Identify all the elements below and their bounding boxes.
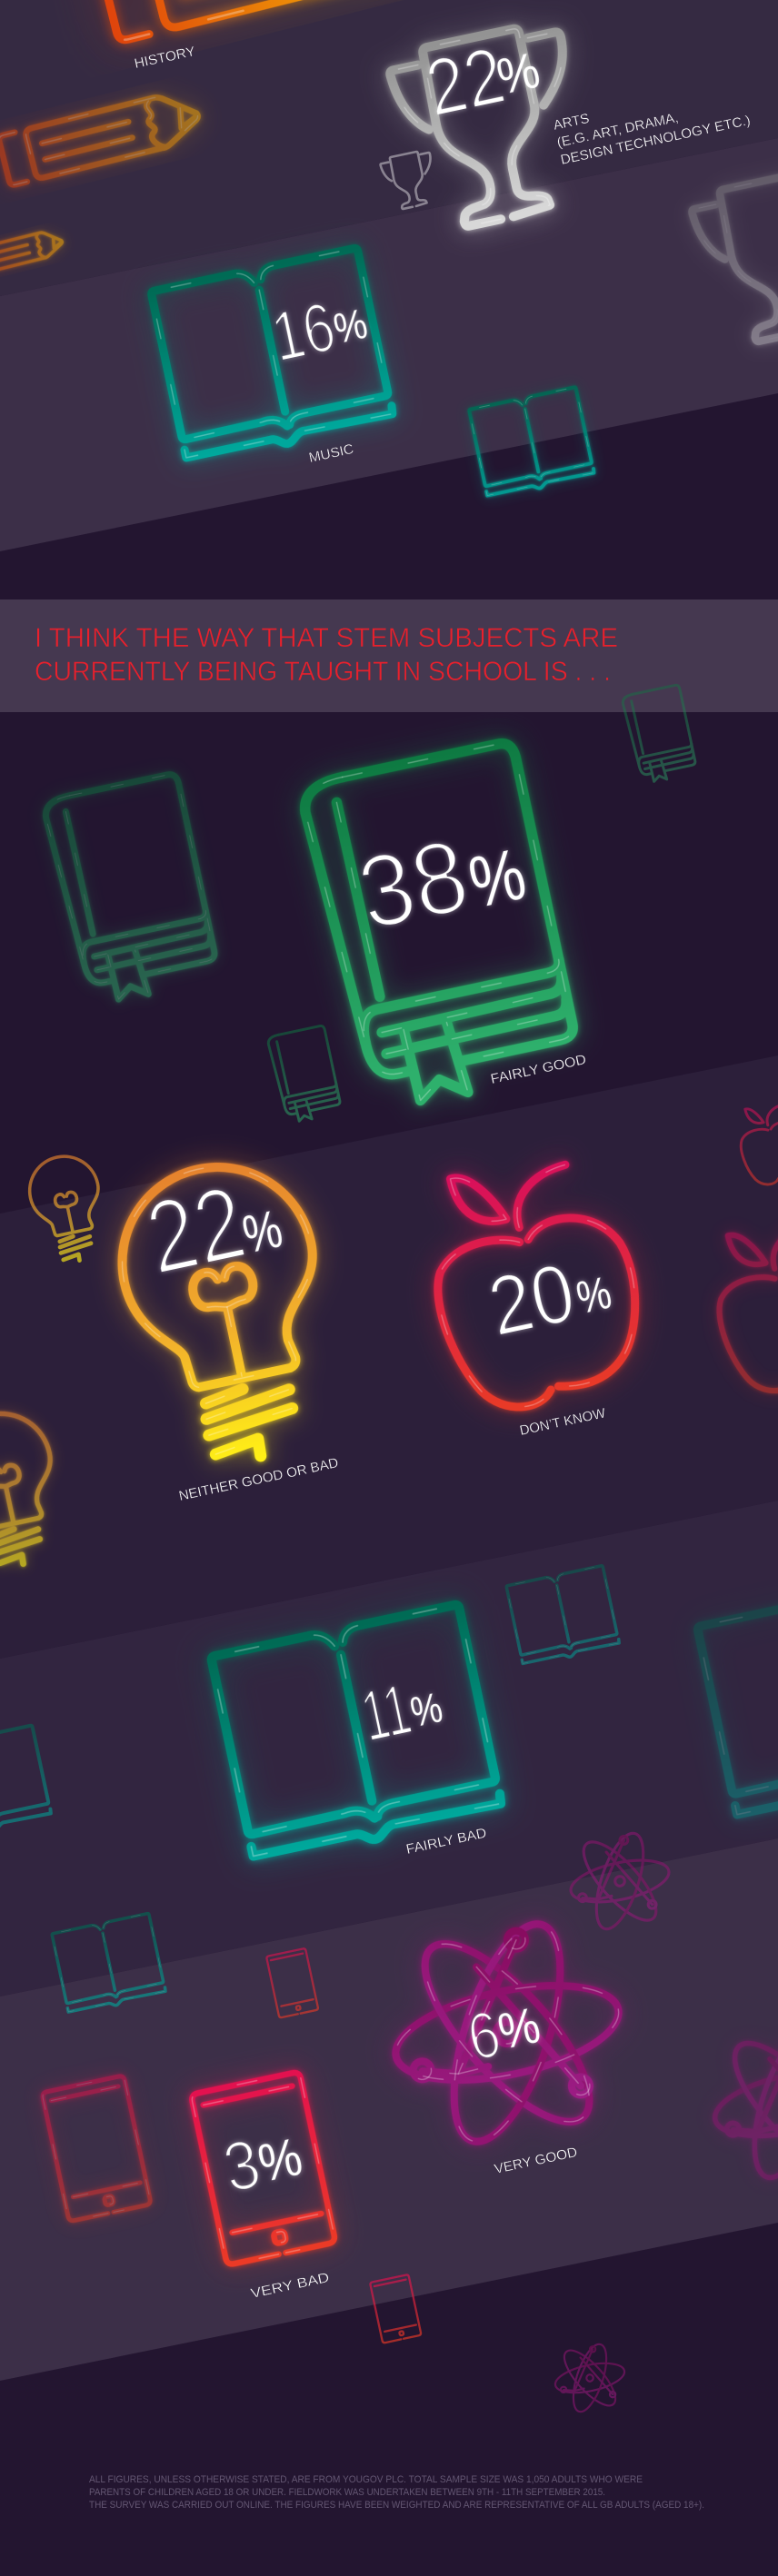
icon: ghost trophy right bbox=[689, 166, 778, 350]
icon: ghost tablet small lower bbox=[370, 2274, 422, 2343]
icon: atom, very good bbox=[371, 1893, 643, 2173]
icon: light bulb, neither good or bad bbox=[105, 1149, 353, 1476]
footnote: THE SURVEY WAS CARRIED OUT ONLINE. THE FIGURES HAVE BEEN WEIGHTED AND ARE REPRESENTATIVE OF ALL GB ADULTS (AGED 18+). bbox=[89, 2500, 704, 2511]
icon: ghost closed book left bbox=[43, 773, 220, 1007]
label: music: MUSIC bbox=[307, 441, 355, 466]
figure: 22% neither good or bad: 22 bbox=[137, 1164, 254, 1295]
heading: CURRENTLY BEING TAUGHT IN SCHOOL IS . . . bbox=[35, 657, 611, 687]
figure: 11% fairly bad: 11 bbox=[354, 1669, 417, 1757]
label: don't know: DON’T KNOW bbox=[518, 1405, 608, 1439]
label: neither good or bad: NEITHER GOOD OR BAD bbox=[177, 1455, 340, 1504]
figure: 16% music: 16 bbox=[265, 288, 342, 377]
lighter diagonal band behind trophy and music bbox=[0, 138, 778, 551]
footnote bbox=[89, 2474, 704, 2511]
icon: ghost atom right bbox=[698, 2008, 778, 2199]
label: arts: (E.G. ART, DRAMA, bbox=[555, 110, 680, 151]
label: fairly good: FAIRLY GOOD bbox=[489, 1052, 588, 1087]
diagonal band behind bulb and apple bbox=[0, 1055, 778, 1659]
icon: open book, music bbox=[151, 247, 394, 465]
icon: ghost bulb left bbox=[0, 1404, 71, 1574]
icon: large trophy, arts bbox=[386, 20, 595, 235]
figure: 20% don't know: % bbox=[573, 1266, 615, 1323]
figure: 22% arts: 22 bbox=[418, 29, 512, 134]
top background band bbox=[0, 0, 778, 296]
label: very good: VERY GOOD bbox=[493, 2145, 579, 2177]
figure: 3% very bad bbox=[217, 2116, 309, 2208]
icon: ghost pencil medium bbox=[0, 88, 204, 186]
figure: 3% very bad: % bbox=[254, 2127, 307, 2194]
icon: ghost atom lower bbox=[548, 2334, 632, 2422]
icon: ghost bulb small bbox=[24, 1150, 113, 1268]
icon: ghost tablet left bbox=[42, 2076, 151, 2222]
icon: open book, fairly bad bbox=[211, 1604, 504, 1865]
icon: closed book, fairly good bbox=[300, 741, 582, 1113]
icon: ghost open book upper bbox=[506, 1565, 620, 1667]
heading band bbox=[0, 599, 778, 712]
icon: ghost open book lower left bbox=[52, 1913, 166, 2016]
figure: 6% very good: 6 bbox=[462, 1997, 507, 2076]
heading bbox=[35, 623, 618, 687]
figure: 11% fairly bad: % bbox=[406, 1683, 446, 1736]
label: very bad: VERY BAD bbox=[249, 2270, 331, 2302]
label: arts: DESIGN TECHNOLOGY ETC.) bbox=[559, 113, 752, 168]
icon: ghost closed book top right bbox=[622, 685, 698, 785]
icon: small open book bbox=[469, 387, 595, 500]
icon: ghost apple small bbox=[733, 1098, 778, 1189]
figure: 20% don't know: 20 bbox=[481, 1245, 583, 1354]
footnote: ALL FIGURES, UNLESS OTHERWISE STATED, ARE FROM YOUGOV PLC. TOTAL SAMPLE SIZE WAS 1,050 ADULTS WHO WERE bbox=[89, 2474, 643, 2485]
icon: ghost atom upper bbox=[560, 1819, 680, 1943]
figure: 38% fairly good: 38 bbox=[349, 817, 477, 951]
figure: 16% music: % bbox=[330, 299, 372, 352]
icon: ghost apple right bbox=[703, 1214, 778, 1400]
figure: 38% fairly good: % bbox=[463, 833, 533, 923]
figure: 38% fairly good bbox=[349, 806, 534, 951]
label: history: HISTORY bbox=[133, 44, 196, 72]
figure: 22% arts: % bbox=[492, 41, 544, 105]
diagonal band behind fairly bad bbox=[0, 1501, 778, 1996]
icon: ghost trophy small bbox=[379, 149, 440, 212]
label: arts: ARTS bbox=[552, 111, 591, 134]
figure: 6% very good: % bbox=[493, 1996, 545, 2060]
icon: ghost pencil small bbox=[0, 228, 65, 277]
figure: 22% neither good or bad: % bbox=[238, 1199, 287, 1264]
footnote: PARENTS OF CHILDREN AGED 18 OR UNDER. FIELDWORK WAS UNDERTAKEN BETWEEN 9TH - 11TH SEPTEMBER 2015. bbox=[89, 2487, 605, 2498]
lighter diagonal band behind very bad and very good bbox=[0, 1838, 778, 2381]
label: fairly bad: FAIRLY BAD bbox=[404, 1826, 488, 1858]
icon: ghost open book right bbox=[697, 1577, 778, 1823]
icon: apple, don't know bbox=[414, 1146, 654, 1420]
icon: tablet, very bad bbox=[191, 2072, 335, 2265]
icon: large pencil, history bbox=[97, 0, 466, 42]
icon: ghost closed book small bbox=[267, 1025, 343, 1125]
figure: 6% very good bbox=[462, 1989, 547, 2076]
icon: ghost tablet small upper bbox=[266, 1948, 318, 2018]
icon: ghost open book left bbox=[0, 1725, 52, 1840]
figure: 3% very bad: 3 bbox=[217, 2125, 267, 2208]
heading: I THINK THE WAY THAT STEM SUBJECTS ARE bbox=[35, 623, 618, 653]
